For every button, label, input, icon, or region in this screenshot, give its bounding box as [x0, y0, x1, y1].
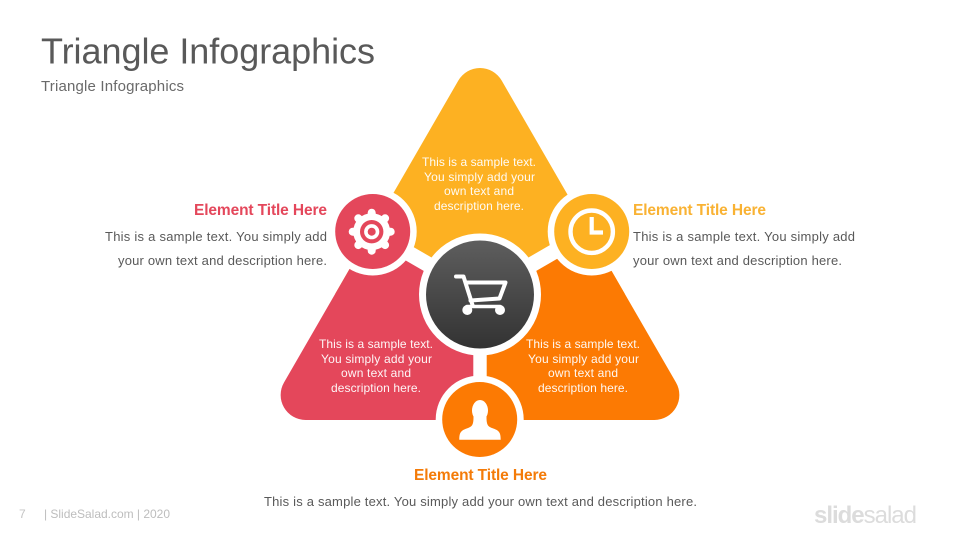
title: Triangle Infographics — [41, 30, 375, 72]
callout: bottom element — [264, 467, 697, 509]
text: red segment — [319, 337, 433, 395]
triangle diagram — [281, 68, 679, 463]
logo: slidesalad: slidesalad — [814, 502, 917, 529]
callout: bottom element: Element Title Here — [414, 467, 547, 484]
callout: left element: This is a sample text. You simply add — [105, 229, 327, 244]
subtitle: Triangle Infographics — [41, 78, 184, 95]
panel: top yellow segment — [335, 68, 625, 294]
text: red segment: You simply add your — [321, 352, 432, 366]
callout: right element: Element Title Here — [633, 202, 766, 219]
callout: left element: Element Title Here — [194, 202, 327, 219]
callout: left element: your own text and description here. — [118, 253, 327, 268]
icon: person badge — [436, 376, 524, 464]
text: yellow segment: description here. — [434, 199, 524, 213]
text: yellow segment: You simply add your — [424, 170, 535, 184]
text: red segment: This is a sample text. — [319, 337, 433, 351]
text: orange segment: You simply add your — [528, 352, 639, 366]
callout: left element — [105, 202, 327, 268]
icon: gear badge — [329, 188, 417, 276]
text: red segment: own text and — [341, 366, 411, 380]
footer page number: 7 — [19, 507, 26, 521]
panel: left red segment — [280, 260, 474, 420]
callout: right element: your own text and description here. — [633, 253, 842, 268]
text: yellow segment — [422, 155, 536, 213]
text: yellow segment: own text and — [444, 184, 514, 198]
footer credit: | SlideSalad.com | 2020 — [44, 507, 170, 521]
text: yellow segment: This is a sample text. — [422, 155, 536, 169]
callout: right element — [633, 202, 855, 268]
callout: right element: This is a sample text. You simply add — [633, 229, 855, 244]
text: red segment: description here. — [331, 381, 421, 395]
text: orange segment: own text and — [548, 366, 618, 380]
callout: bottom element: This is a sample text. You simply add your own text and description here. — [264, 494, 697, 509]
text: orange segment: This is a sample text. — [526, 337, 640, 351]
icon: shopping cart hub — [419, 234, 541, 356]
icon: clock badge — [548, 188, 636, 276]
text: orange segment: description here. — [538, 381, 628, 395]
text: orange segment — [526, 337, 640, 395]
panel: right orange segment — [486, 258, 680, 420]
white separators — [372, 232, 588, 420]
